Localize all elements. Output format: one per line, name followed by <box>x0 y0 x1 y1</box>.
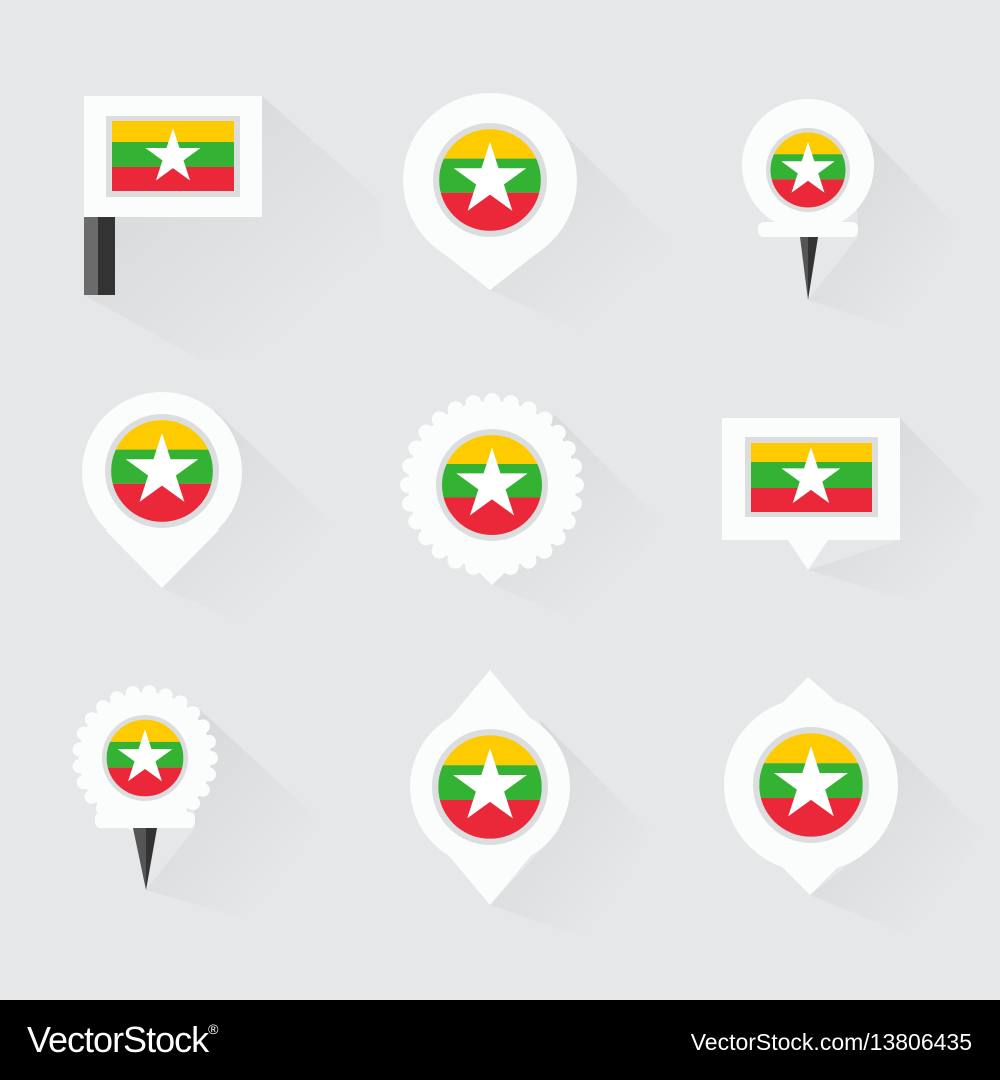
icon: circle with top and bottom tips <box>724 677 980 940</box>
icon: small sawtooth push pin <box>79 692 320 920</box>
footer logo text: ® <box>208 1021 219 1037</box>
footer bar <box>0 1000 1000 1080</box>
footer logo text: VectorStock <box>27 1019 208 1060</box>
icon: teardrop pin large <box>82 392 330 630</box>
icon: rectangle callout <box>722 418 980 610</box>
footer id text: VectorStock.com/13806435 <box>691 1029 972 1055</box>
icon: sawtooth badge <box>408 401 660 630</box>
icon: flag on pole <box>84 96 380 360</box>
icon: teardrop pin <box>403 93 680 340</box>
icon: push pin <box>742 99 960 330</box>
icon: double-tip pin <box>410 670 650 940</box>
